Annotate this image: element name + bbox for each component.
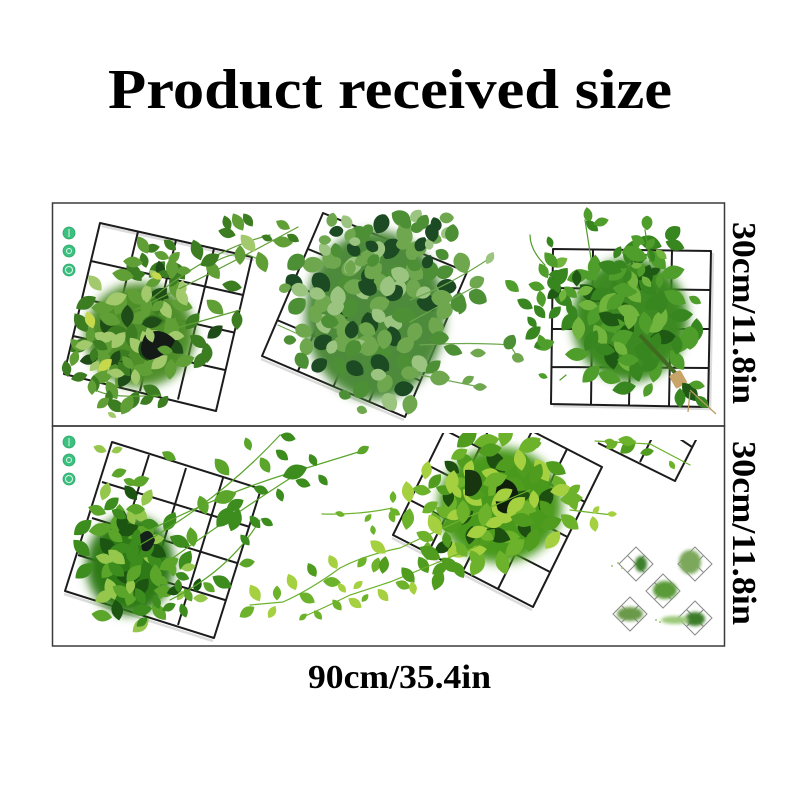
grid fragment top right xyxy=(598,440,697,482)
panel: top sticker sheet xyxy=(45,198,724,426)
wire grid 5 xyxy=(392,433,603,611)
mini sticker 2 xyxy=(678,547,712,581)
title: Product received size xyxy=(108,59,672,121)
twine knot xyxy=(669,370,688,389)
plant 3: tied herb bundle xyxy=(502,206,719,416)
mini sticker 3 xyxy=(646,574,680,608)
plant 2: round-leaf pilea bunch xyxy=(261,198,526,423)
fragment vine top right xyxy=(595,441,690,465)
panel: bottom sticker sheet xyxy=(52,425,726,647)
mini sticker previews xyxy=(611,547,712,635)
label: sheet width: 90cm/35.4in xyxy=(308,659,491,696)
wire grid 2 xyxy=(261,213,467,420)
label: top sheet height: 30cm/11.8in xyxy=(725,222,762,404)
label: bottom sheet height: 30cm/11.8in xyxy=(725,441,762,625)
icons: bottom sheet certification badges xyxy=(63,436,75,485)
plant 5: bright hanging vine xyxy=(240,433,691,620)
mini sticker 4 xyxy=(613,597,647,631)
plant 1: trailing variegated vine xyxy=(45,211,301,423)
icons: top sheet certification badges xyxy=(63,227,75,276)
wire grid 4 xyxy=(64,442,261,641)
wire grid 3 xyxy=(551,249,713,409)
mini sticker 1 xyxy=(611,547,653,581)
wire grid 1 xyxy=(64,223,254,411)
long trailing stem leaves xyxy=(237,510,397,622)
plant 4: dark leafy vine xyxy=(49,431,371,645)
mini sticker 5 xyxy=(655,601,712,635)
